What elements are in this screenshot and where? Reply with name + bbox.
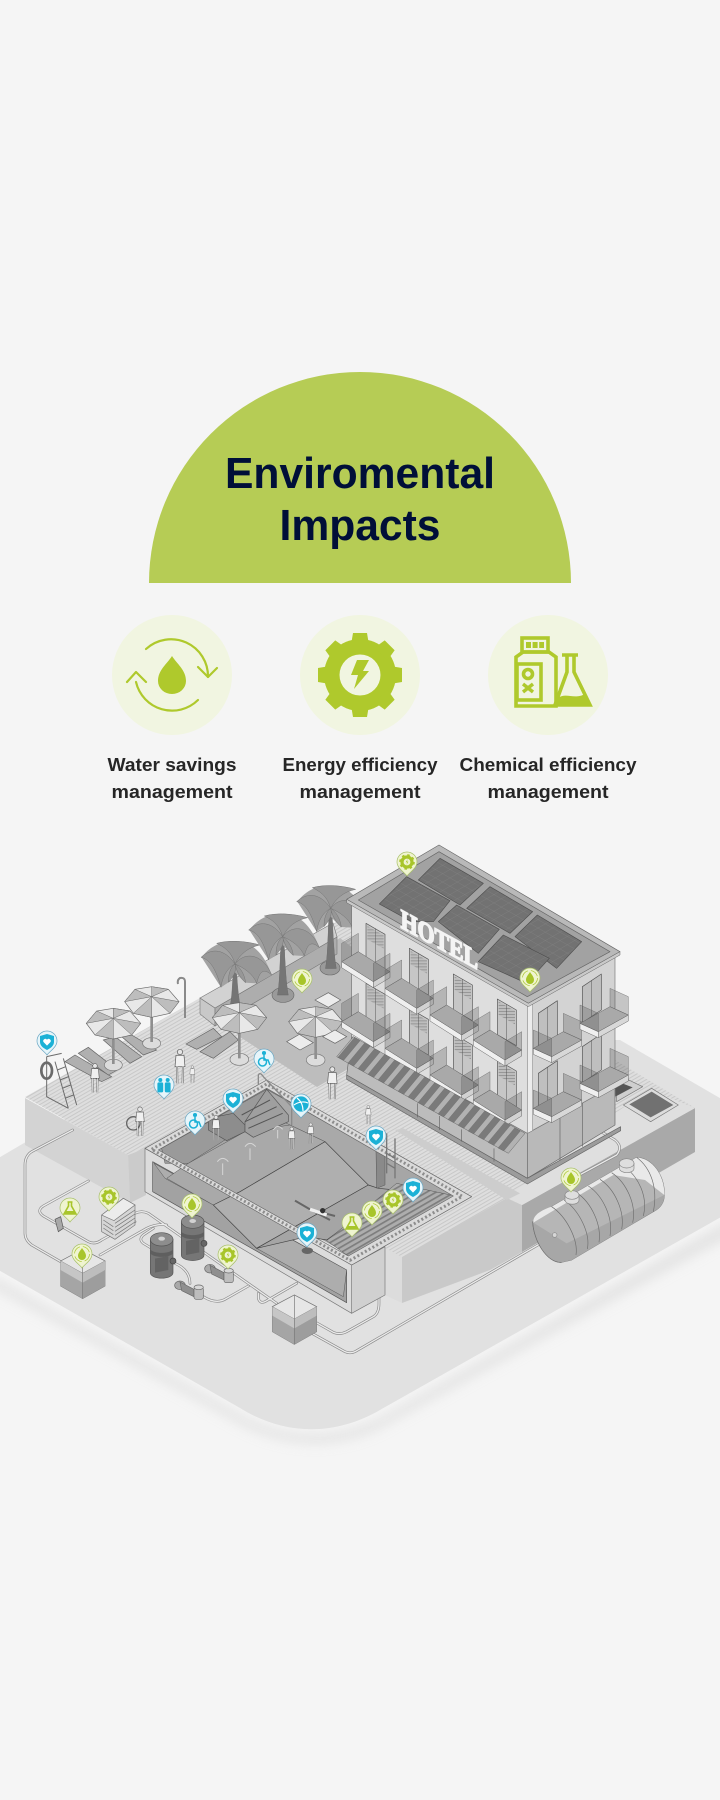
walkway strip [395,1128,520,1200]
ground floor right [527,1085,615,1178]
sun loungers [65,1028,238,1082]
title: Impacts [280,501,440,550]
deck side faces [25,1098,695,1303]
pool cutaway water wedge [154,1163,347,1297]
pin: chemical deck [342,1213,362,1237]
pin: safety, ladder [366,1126,386,1150]
title: Enviromental [225,449,495,498]
ground floor [347,1037,527,1178]
pool ladder [387,1133,395,1178]
back-right wall [267,1089,378,1188]
panel: energy efficiency [282,615,438,802]
panel: water savings [108,615,236,802]
back grate planting [615,1081,633,1097]
pool [145,1074,472,1313]
stair rail [258,1074,292,1125]
pump two [205,1264,233,1283]
palm trees [201,886,367,1006]
pin: water filter [182,1194,202,1218]
cube tank right [272,1295,317,1344]
roof parapet [347,845,620,1003]
deep floor [257,1185,395,1248]
heat exchanger [102,1198,135,1239]
floor drain [302,1247,313,1254]
pin: safety, deck [403,1178,423,1202]
pin: safety, drain [297,1223,317,1247]
pin: safety, lifeguard [37,1031,57,1055]
corner pilaster [527,1002,533,1133]
base platform [0,1040,720,1429]
hotel sign: HOTEL [401,904,478,976]
pin: water roof [520,968,540,992]
label: water savings: Water savings [108,754,236,775]
pin: recreation ball [291,1094,311,1118]
rim tile dashes [152,1084,462,1260]
label: energy efficiency: Energy efficiency [282,754,438,775]
pump one [175,1281,203,1299]
umbrellas [86,987,343,1071]
tank hatches [565,1159,634,1204]
panel: chemical efficiency [460,615,637,802]
pin: energy deck [383,1190,403,1214]
tank body [533,1157,664,1262]
label: chemical efficiency: Chemical efficiency [460,754,637,775]
shower [178,978,185,1018]
icon: bottle and flask [516,638,590,706]
ladder column [376,1147,385,1188]
cube tank left [61,1249,105,1299]
tank upper highlight [533,1157,664,1223]
planter pots [272,961,340,1002]
tank lower shading [533,1195,664,1262]
pin: safety, stairs [223,1089,243,1113]
hotel [337,845,678,1200]
illustration: isometric hotel and pool [0,845,720,1443]
pool right outer wall [352,1247,385,1313]
pool cutaway section [153,1162,347,1303]
icon circle: energy [300,615,420,735]
label: energy efficiency: management [300,781,420,802]
pipes [25,1125,620,1353]
title [225,449,495,550]
pin: water cube [72,1244,92,1268]
pool basin [157,1087,453,1254]
shopfront dividers [417,1100,583,1162]
planter wall [200,923,337,1026]
solar panels [379,858,582,983]
icon: gear with bolt [301,616,419,734]
plinth [347,1075,621,1184]
ground shadow [0,1220,720,1443]
pin: chemical dosing [60,1198,80,1222]
pool stairs [208,1089,288,1141]
label: water savings: management [112,781,232,802]
pin: water deck [362,1201,382,1225]
icon: water drop with arrows [127,639,217,711]
left wall [352,905,527,1133]
label: chemical efficiency: management [488,781,608,802]
shallow floor [167,1125,325,1205]
icon circle: water [112,615,232,735]
hotel surround [507,1090,695,1205]
right wall [527,955,615,1133]
title semicircle [149,372,571,583]
planted grate [623,1088,678,1122]
pin: water tank [561,1168,581,1192]
pin: accessibility deck [254,1049,274,1073]
pin: accessibility pool [185,1111,205,1135]
controller box [55,1217,63,1232]
pin: energy pump [218,1245,238,1269]
pin: energy roof [397,852,417,876]
pool rim [145,1080,472,1265]
sloped floor [213,1142,368,1248]
eave [347,899,620,1007]
awnings [337,1037,525,1153]
underground tank [533,1157,664,1262]
balconies [342,933,628,1126]
deck surface [25,920,695,1257]
tank ribs [533,1157,655,1262]
pin: energy heat exchanger [99,1187,119,1211]
back-left wall [162,1089,267,1163]
filter tank front [150,1233,176,1278]
pool end wood deck [327,1183,455,1256]
filter tank back [181,1215,207,1260]
pin: water courtyard [292,969,312,993]
fountains [217,1126,283,1175]
back grate [615,1073,643,1102]
bathers [212,1105,371,1220]
cafe tables [287,993,347,1050]
pin: changing rooms [154,1075,174,1099]
location pins [37,852,581,1269]
tank inlet [552,1233,557,1237]
courtyard [218,938,420,1087]
pool front frame [145,1148,352,1313]
plant room [55,1198,317,1344]
guests [91,1049,337,1136]
roof surface [358,852,610,997]
lifeguard chair [41,1053,77,1108]
windows [366,923,601,1109]
icon circle: chemical [488,615,608,735]
